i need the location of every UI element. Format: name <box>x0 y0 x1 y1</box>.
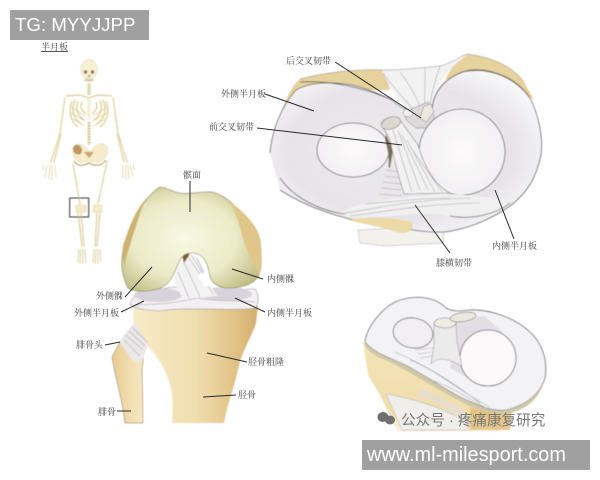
under ligament <box>358 226 444 246</box>
icon: wechat bubbles <box>378 412 395 424</box>
meniscus disc <box>270 70 542 232</box>
leader line and label: 胫骨: 胫骨 <box>238 390 256 400</box>
leader line and label: 腓骨 <box>98 406 131 417</box>
leader line and label: 外侧髁: 外侧髁 <box>96 290 123 301</box>
anterior horn striations <box>378 165 402 199</box>
leader line and label: 腓骨: 腓骨 <box>98 406 116 417</box>
leader line and label: 外侧半月板 <box>221 88 314 111</box>
leader line and label: 胫骨粗隆 <box>207 353 284 367</box>
posterior cruciate ligament <box>404 102 435 128</box>
transverse ligament band <box>340 194 510 217</box>
leader line and label: 腓骨头: 腓骨头 <box>76 339 104 350</box>
medial articular surface <box>419 109 505 195</box>
leader line and label: 外侧半月板: 外侧半月板 <box>74 307 119 318</box>
legs <box>73 161 107 264</box>
bottom banner: website <box>362 440 590 470</box>
tibiofibular ligament <box>120 322 148 362</box>
anterior cruciate ligament <box>381 117 450 194</box>
leader line and label: 膝横韧带 <box>415 205 472 268</box>
leader line and label: 内侧半月板: 内侧半月板 <box>267 307 312 318</box>
ligament below plateau <box>386 394 470 430</box>
top banner: TG handle: TG: MYYJJPP <box>15 14 135 35</box>
leader line and label: 胫骨粗隆: 胫骨粗隆 <box>248 356 284 367</box>
leader line and label: 后交叉韧带 <box>286 55 421 118</box>
leader line and label: 内侧半月板 <box>492 190 537 251</box>
leader line and label: 内侧髁 <box>232 269 294 284</box>
skull <box>80 60 98 82</box>
horn striations <box>415 348 433 358</box>
cruciate ligaments <box>175 253 218 299</box>
menisci <box>130 287 258 311</box>
leader line and label: 内侧半月板: 内侧半月板 <box>492 240 537 251</box>
medial surface <box>460 330 516 386</box>
femur <box>122 187 261 291</box>
leader line and label: 内侧半月板 <box>235 298 312 318</box>
leader line and label: 后交叉韧带: 后交叉韧带 <box>286 55 331 66</box>
anterior knee illustration <box>74 169 312 423</box>
dark recess <box>385 134 393 172</box>
leader line and label: 前交叉韧带: 前交叉韧带 <box>209 121 254 132</box>
pelvis <box>73 144 107 165</box>
leader line and label: 膝横韧带: 膝横韧带 <box>436 257 472 268</box>
leader line and label: 髌面: 髌面 <box>183 169 201 180</box>
leader line and label: 外侧髁 <box>96 267 152 301</box>
knee locator box <box>70 198 89 217</box>
leader line and label: 胫骨 <box>203 390 256 400</box>
spine and ribs <box>66 83 112 145</box>
superior tibial plateau view <box>209 54 542 268</box>
leader line and label: 内侧髁: 内侧髁 <box>267 273 294 284</box>
lateral articular surface <box>317 123 389 177</box>
leader line and label: 外侧半月板 <box>74 301 144 318</box>
label: 半月板 heading: 半月板 <box>41 41 68 52</box>
lateral surface <box>391 315 435 351</box>
watermark: WeChat official account: 公众号 · 疼痛康复研究 <box>401 411 546 429</box>
arms <box>43 98 134 180</box>
bone below plateau <box>363 342 510 432</box>
lower oblique view of tibial plateau <box>363 297 546 432</box>
bone rim top <box>282 54 534 110</box>
skeleton figure <box>43 60 134 264</box>
leader line and label: 前交叉韧带 <box>209 121 402 145</box>
posterior cruciate stump <box>450 311 476 323</box>
bottom banner: website: www.ml-milesport.com <box>367 444 566 466</box>
top banner: TG handle <box>10 10 149 40</box>
fibula <box>112 325 143 423</box>
leader line and label: 外侧半月板: 外侧半月板 <box>221 88 266 99</box>
plateau disc <box>365 297 546 410</box>
posterior fold <box>382 55 468 118</box>
tan blob anterior <box>347 218 412 233</box>
leader line and label: 腓骨头 <box>76 339 120 350</box>
tibia <box>133 306 258 423</box>
leader line and label: 髌面 <box>183 169 201 212</box>
anterior cruciate stump <box>431 323 462 366</box>
